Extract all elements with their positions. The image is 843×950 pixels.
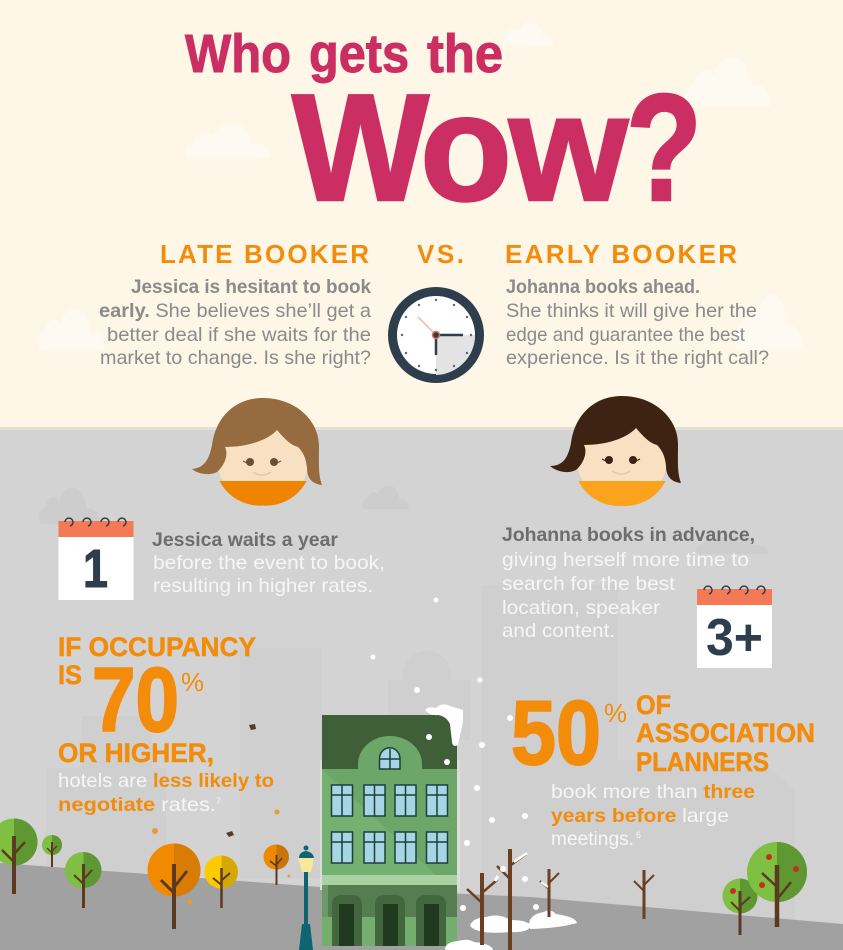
text: Jessica waits a year: Jessica waits a year [152,529,338,551]
title: Who gets the: gets [309,24,409,84]
text: Johanna books in advance: search for the best [502,573,676,595]
gray clouds [39,486,768,554]
bare winter trees and snow [445,849,654,950]
title: Wow? [292,63,702,233]
heading: late booker: LATE BOOKER [160,239,369,269]
stat: 70 percent occupancy: hotels are less likely to [58,770,274,792]
heading: vs: VS. [417,239,464,269]
stat: 50 percent of association planners: ASSOCIATION [636,718,815,748]
stat: 50 percent of association planners [511,683,815,850]
text: Jessica waits a year: before the event to book, [153,552,385,574]
sky clouds [38,22,802,350]
title: Who gets the: the [427,24,503,84]
heading: early booker: EARLY BOOKER [505,239,737,269]
text: late booker intro: market to change. Is she right? [100,347,371,369]
stat: 50 percent of association planners: 50 [511,683,601,784]
stat: 70 percent occupancy: IS [58,660,82,690]
text: early booker intro: experience. Is it the right call? [506,347,769,369]
icon: clock [392,292,480,378]
text: Jessica waits a year: resulting in higher rates. [153,575,373,597]
text: Johanna books in advance: location, speaker [502,597,661,619]
tree: green 2 [42,835,62,867]
stat: 70 percent occupancy: 70 [92,650,179,751]
character: Jessica [192,398,322,506]
text: Johanna books in advance: and content. [502,620,615,642]
sky background [0,0,843,429]
title: Wow?: w [508,63,629,233]
stat: 70 percent occupancy [58,632,274,816]
icon: calendar 3+: 3+ [706,609,763,667]
icon: calendar 1: 1 [83,539,108,599]
text: early booker intro: Johanna books ahead. [506,276,700,298]
title: Wow?: W [292,63,430,233]
text: late booker intro [99,276,371,369]
stat: 50 percent of association planners: years before large [551,805,729,827]
title: Wow?: ? [626,63,702,233]
text: late booker intro: Jessica is hesitant to book [131,276,371,298]
stat: 50 percent of association planners: meetings. [551,828,634,850]
text: Johanna books in advance: Johanna books in advance, [502,524,755,546]
title: Who gets the: Who [185,24,291,84]
tree: apple large [747,842,807,927]
stat: 50 percent of association planners: % [604,698,627,728]
snowflakes [370,598,539,911]
tree: green 1 [0,818,38,894]
text: late booker intro: better deal if she waits for the [107,324,371,346]
stat: 70 percent occupancy: 7 [216,796,221,806]
stat: 50 percent of association planners: book more than three [551,781,755,803]
text: early booker intro: edge and guarantee the best [506,324,746,346]
tree: orange large [148,844,200,929]
text: early booker intro [506,276,769,369]
stat: 70 percent occupancy: % [181,667,204,697]
tree: small orange [264,844,289,885]
icon: calendar 3+ [697,586,772,668]
roof snow [425,704,463,746]
stat: 70 percent occupancy: OR HIGHER, [58,738,214,768]
tree: green 3 [65,852,102,908]
text: Johanna books in advance [502,524,755,642]
windows [332,748,448,863]
title: Who gets the [185,24,503,84]
stat: 50 percent of association planners: 6 [636,830,641,840]
text: early booker intro: She thinks it will give her the [506,300,757,322]
tree: yellow [204,856,238,908]
street lamp [298,846,314,950]
background city buildings [46,585,795,925]
lower gray background [0,429,843,950]
doors [332,895,446,946]
stat: 70 percent occupancy: negotiate rates. [58,794,216,816]
falling leaves [152,724,290,904]
text: Jessica waits a year [152,529,385,597]
stat: 50 percent of association planners: OF [636,690,671,720]
ground [0,863,843,950]
tree: apple small [722,878,758,935]
building [320,704,463,946]
text: Johanna books in advance: giving herself more time to [502,549,749,571]
icon: calendar 1 [58,518,134,600]
stat: 70 percent occupancy: IF OCCUPANCY [58,632,256,662]
title: Wow?: o [420,63,512,233]
horizon line [0,427,843,430]
character: Johanna [550,396,681,506]
stat: 50 percent of association planners: PLANNERS [636,747,769,777]
text: late booker intro: early. She believes she’ll get a [99,300,371,322]
